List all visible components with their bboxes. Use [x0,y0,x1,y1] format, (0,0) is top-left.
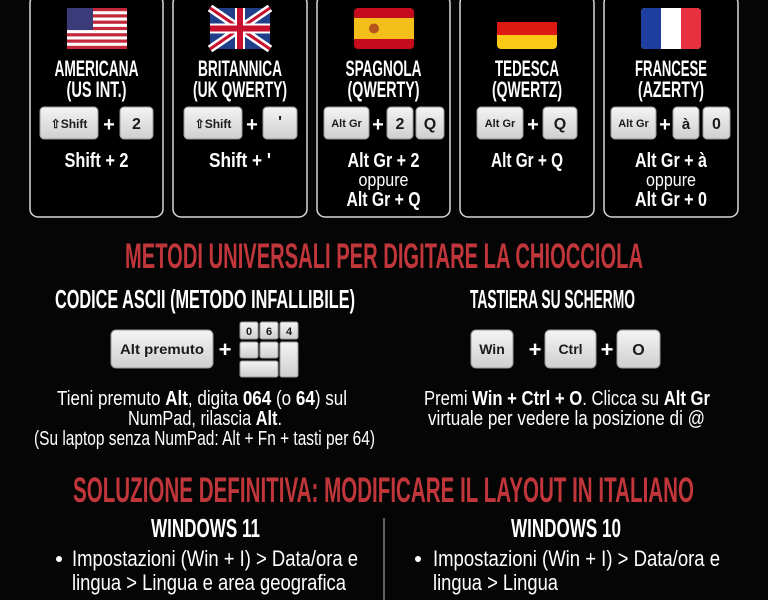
keys: shift + ': ' [278,114,282,131]
keys: win + ctrl + o: Ctrl [558,341,583,357]
keys: alt gr + 2 q: 2 [396,116,405,133]
result text [635,150,708,211]
bullet list: windows 11 steps: lingua > Lingua e area geografica [72,570,347,595]
keys: alt premuto + numpad: + [219,337,231,362]
bullet list: windows 10 steps [415,546,720,595]
card: britannica: (UK QWERTY) [193,77,287,102]
text: on-screen keyboard instructions [424,388,710,430]
heading: americana: AMERICANA [54,56,139,81]
card: americana [30,0,163,217]
icon: France flag [641,8,701,49]
result text: Shift + ' [209,150,271,172]
panel: windows 10 [415,513,720,595]
card: tedesca [460,0,594,217]
keys: alt premuto + numpad: Alt premuto [120,341,204,357]
icon: Germany flag [497,8,557,49]
bullet list: windows 11 steps: Impostazioni (Win + I) > Data/ora e [72,546,358,571]
keys: alt gr + q: Q [554,116,566,133]
heading: tedesca: TEDESCA [495,56,559,81]
keys: shift + ' [184,107,297,139]
panel: codice ascii [34,284,375,450]
result text: Alt Gr + à [635,150,708,172]
keys: alt gr + 2 q: Q [424,116,436,133]
keys: alt gr + q: Alt Gr [485,118,516,130]
result text: oppure [646,170,696,190]
heading: francese: FRANCESE [635,56,707,81]
panel: windows 11 [56,513,358,595]
keys: shift + ': + [246,114,258,136]
card: tedesca: (QWERTZ) [492,77,562,102]
result text: Alt Gr + 0 [635,189,707,211]
keys: alt gr + à 0 [611,107,730,139]
bullet list: windows 11 steps [56,546,358,595]
keys: alt gr + 2 q: + [372,114,384,136]
panel: tastiera su schermo [424,284,710,430]
text: ascii instructions [34,388,375,450]
keys: alt premuto + numpad: 4 [286,326,293,338]
keys: shift + 2: ⇧Shift [51,117,87,131]
keys: alt gr + 2 q [324,107,444,139]
result text: oppure [358,170,408,190]
text: ascii instructions: NumPad, rilascia Alt. [128,408,282,430]
text: ascii instructions: Tieni premuto Alt, digita 064 (o 64) sul [57,388,347,410]
text: ascii instructions: (Su laptop senza NumPad: Alt + Fn + tasti per 64) [34,428,375,450]
keys: win + ctrl + o: O [632,342,645,359]
card: francese: (AZERTY) [638,77,704,102]
heading: spagnola: SPAGNOLA [346,56,422,81]
subheading: windows 10: WINDOWS 10 [511,513,621,543]
result text: Alt Gr + Q [346,189,420,211]
keys: win + ctrl + o [471,330,660,368]
icon: Spain flag [354,8,414,49]
subheading: windows 11: WINDOWS 11 [151,513,260,543]
icon: US flag [67,8,127,49]
result text: Alt Gr + Q [491,150,563,172]
keys: alt gr + à 0: à [682,116,691,133]
result text: Shift + 2 [64,150,128,172]
keys: alt gr + q [477,107,577,139]
keys: shift + 2 [40,107,153,139]
keys: win + ctrl + o: + [601,337,613,362]
keys: alt premuto + numpad: 6 [266,326,272,338]
keys: alt gr + à 0: Alt Gr [618,118,649,130]
bullet list: windows 10 steps: Impostazioni (Win + I) > Data/ora e [433,546,720,571]
subheading: codice ascii: CODICE ASCII (METODO INFALLIBILE) [55,284,355,314]
heading: britannica: BRITANNICA [198,56,282,81]
keys: win + ctrl + o: Win [479,341,505,357]
keys: alt premuto + numpad: 0 [246,326,252,338]
keys: shift + ': ⇧Shift [195,117,231,131]
keys: shift + 2: + [103,114,115,136]
icon: UK flag [210,8,270,49]
keys: alt gr + à 0: + [659,114,671,136]
keys: win + ctrl + o: + [529,337,541,362]
card: spagnola: (QWERTY) [348,77,420,102]
result text [346,150,420,211]
bullet list: windows 10 steps: lingua > Lingua [433,570,559,595]
keys: alt gr + 2 q: Alt Gr [331,118,362,130]
text: on-screen keyboard instructions: virtuale per vedere la posizione di @ [428,408,705,430]
keys: alt premuto + numpad [111,322,298,377]
card: spagnola [317,0,450,217]
card: americana: (US INT.) [66,77,126,102]
result text: Alt Gr + 2 [348,150,420,172]
text: on-screen keyboard instructions: Premi Win + Ctrl + O. Clicca su Alt Gr [424,388,710,410]
keys: alt gr + q: + [527,114,539,136]
keys: shift + 2: 2 [132,116,141,133]
card: francese [604,0,738,217]
card: britannica [173,0,307,217]
keys: alt gr + à 0: 0 [712,116,721,133]
